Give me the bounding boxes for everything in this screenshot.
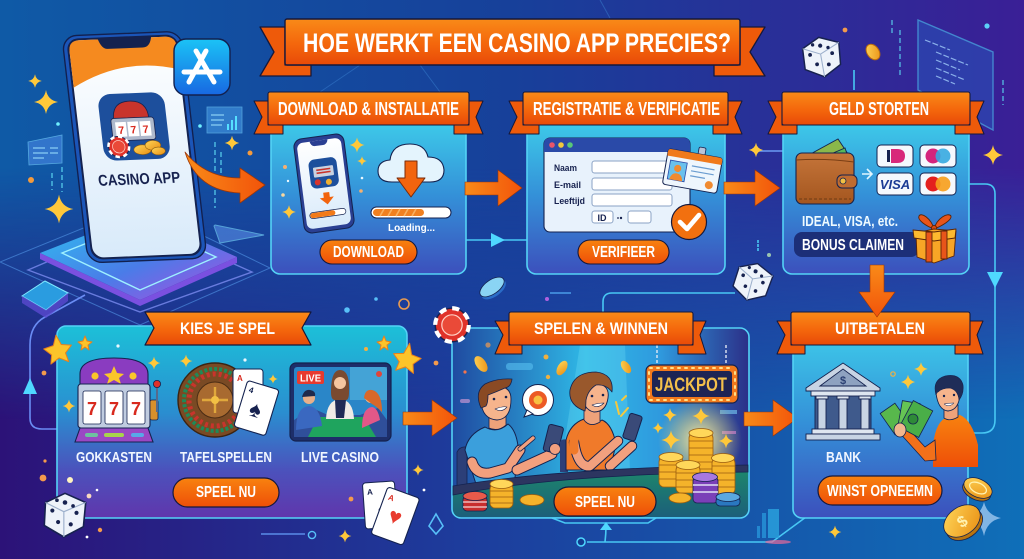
form window: ID (598, 213, 607, 223)
icon: roulette and cards: 4 (248, 385, 255, 395)
icon: poker chip (435, 308, 469, 342)
arrow: play to cash out (744, 400, 798, 436)
button: speel nu (554, 487, 656, 516)
heading ribbon (509, 92, 742, 134)
form window: E-mail (554, 180, 581, 191)
icon: chip stacks (463, 472, 740, 511)
labels: LIVE CASINO (301, 449, 379, 466)
icon: slot machine app logo: 7 (130, 124, 137, 136)
decorative holo panels and particles left (28, 74, 252, 223)
icon: slot machine: 7 (87, 399, 97, 419)
payment logos: VISA (880, 177, 910, 192)
icon: chip speech bubble (522, 384, 554, 417)
payment logos (877, 145, 956, 195)
button: download (320, 240, 417, 264)
scene lights (460, 345, 737, 470)
icon: playing cards bottom: ♠ (377, 501, 388, 518)
man player (457, 379, 564, 487)
icon: gift (913, 215, 956, 263)
heading ribbon: REGISTRATIE & VERIFICATIE (533, 99, 720, 119)
heading ribbon (254, 92, 483, 134)
panel: download & installatie (254, 92, 483, 274)
icon: playing cards bottom: ♥ (385, 503, 406, 531)
icon: slot machine app logo: 7 (142, 124, 149, 136)
heading ribbon (768, 92, 984, 134)
coins floating (463, 342, 633, 379)
arrow: deposit to cash out (859, 265, 895, 317)
connector lines (30, 70, 995, 542)
button: download: DOWNLOAD (333, 244, 404, 261)
curved arrow: phone to download (185, 152, 265, 203)
icon: roulette and cards (178, 363, 279, 437)
icon: die top right (800, 34, 844, 80)
icon: cash (880, 401, 933, 437)
poker table (453, 465, 748, 517)
form window: Naam (554, 163, 577, 174)
button: winst opneemn (818, 476, 942, 505)
heading ribbon: UITBETALEN (835, 319, 925, 338)
labels: GOKKASTEN (76, 449, 152, 466)
button: speel nu (173, 478, 279, 507)
text: casino app: CASINO APP (97, 170, 181, 190)
icon: gold coin large: $ (954, 513, 971, 532)
icon: slot machine (75, 358, 161, 442)
icon: slot machine app logo (97, 92, 171, 161)
labels (76, 449, 379, 466)
heading ribbon (777, 312, 983, 354)
text: bank: BANK (826, 449, 861, 466)
panel: registratie & verificatie (509, 92, 742, 274)
sparkles (63, 344, 368, 501)
icon: slot machine app logo: 7 (118, 125, 125, 137)
icon: id card (662, 142, 724, 194)
heading ribbon: GELD STORTEN (829, 99, 929, 119)
sparkles (281, 137, 367, 219)
heading ribbon (145, 312, 311, 345)
icon: live casino screen: LIVE (300, 374, 321, 384)
icon: die bottom left (44, 493, 86, 537)
panel: uitbetalen (777, 312, 983, 518)
button: speel nu: SPEEL NU (196, 484, 256, 501)
phone platform (0, 205, 270, 325)
icon: playing cards bottom: A (387, 493, 396, 503)
heading ribbon: KIES JE SPEL (180, 319, 275, 338)
button: winst opneemn: WINST OPNEEMN (827, 483, 933, 500)
icon: check badge (672, 204, 706, 240)
bonus label: BONUS CLAIMEN (802, 237, 904, 254)
panel: geld storten (768, 92, 984, 274)
decorations bottom right (757, 502, 1001, 544)
heading ribbon: DOWNLOAD & INSTALLATIE (278, 99, 459, 119)
decoration: code screen top right (843, 20, 1003, 130)
heading ribbon: SPELEN & WINNEN (534, 319, 668, 338)
panel: spelen & winnen (452, 312, 749, 518)
icon: cloud download (378, 144, 444, 197)
decorations top right: coin and sparks (749, 42, 1003, 257)
panel: kies je spel (42, 312, 423, 518)
title: HOE WERKT EEN CASINO APP PRECIES? (303, 28, 731, 58)
labels: TAFELSPELLEN (180, 449, 272, 466)
form window (544, 138, 690, 232)
text: ideal visa etc: IDEAL, VISA, etc. (802, 214, 898, 230)
glow and sparkles (652, 398, 742, 482)
icon: jackpot sign: JACKPOT (655, 375, 727, 396)
stars (42, 333, 423, 374)
icon: slot machine: 7 (109, 399, 119, 419)
icon: bank (806, 363, 880, 440)
button: speel nu: SPEEL NU (575, 494, 635, 511)
woman player (560, 372, 643, 472)
icon: app store badge (174, 39, 230, 95)
button: verifieer (578, 240, 669, 264)
icon: roulette and cards: A (237, 374, 243, 383)
icon: blue chip (477, 273, 509, 303)
icon: die middle (730, 259, 775, 305)
button: verifieer: VERIFIEER (592, 244, 655, 261)
icon: jackpot sign (646, 345, 738, 403)
person with cash (891, 362, 978, 467)
icon: gold coin small (959, 474, 995, 505)
icon: playing cards bottom (362, 481, 420, 545)
title (260, 19, 765, 76)
arrow: registration to deposit (724, 170, 780, 206)
bonus label (794, 232, 919, 257)
icon: live casino screen (290, 363, 391, 441)
icon: roulette and cards: ♠ (246, 396, 265, 423)
decorations left bottom (22, 281, 571, 542)
progress bar (371, 207, 451, 218)
form window: Leeftijd (554, 196, 585, 207)
icon: slot machine: 7 (131, 399, 141, 419)
icon: small phone (293, 133, 355, 234)
arrow: choose game to play (403, 400, 457, 436)
icon: playing cards bottom: A (367, 487, 373, 497)
icon: phone with casino app (62, 31, 207, 263)
connector arrowheads (23, 233, 1003, 546)
icon: gold coin large (938, 498, 989, 547)
text: loading: Loading... (388, 223, 435, 234)
heading ribbon (495, 312, 706, 354)
icon: wallet (796, 139, 857, 204)
icon: coin stacks (490, 428, 735, 508)
arrow: download to registration (465, 170, 522, 206)
icon: bank: $ (840, 375, 846, 387)
small arrow (862, 169, 872, 179)
